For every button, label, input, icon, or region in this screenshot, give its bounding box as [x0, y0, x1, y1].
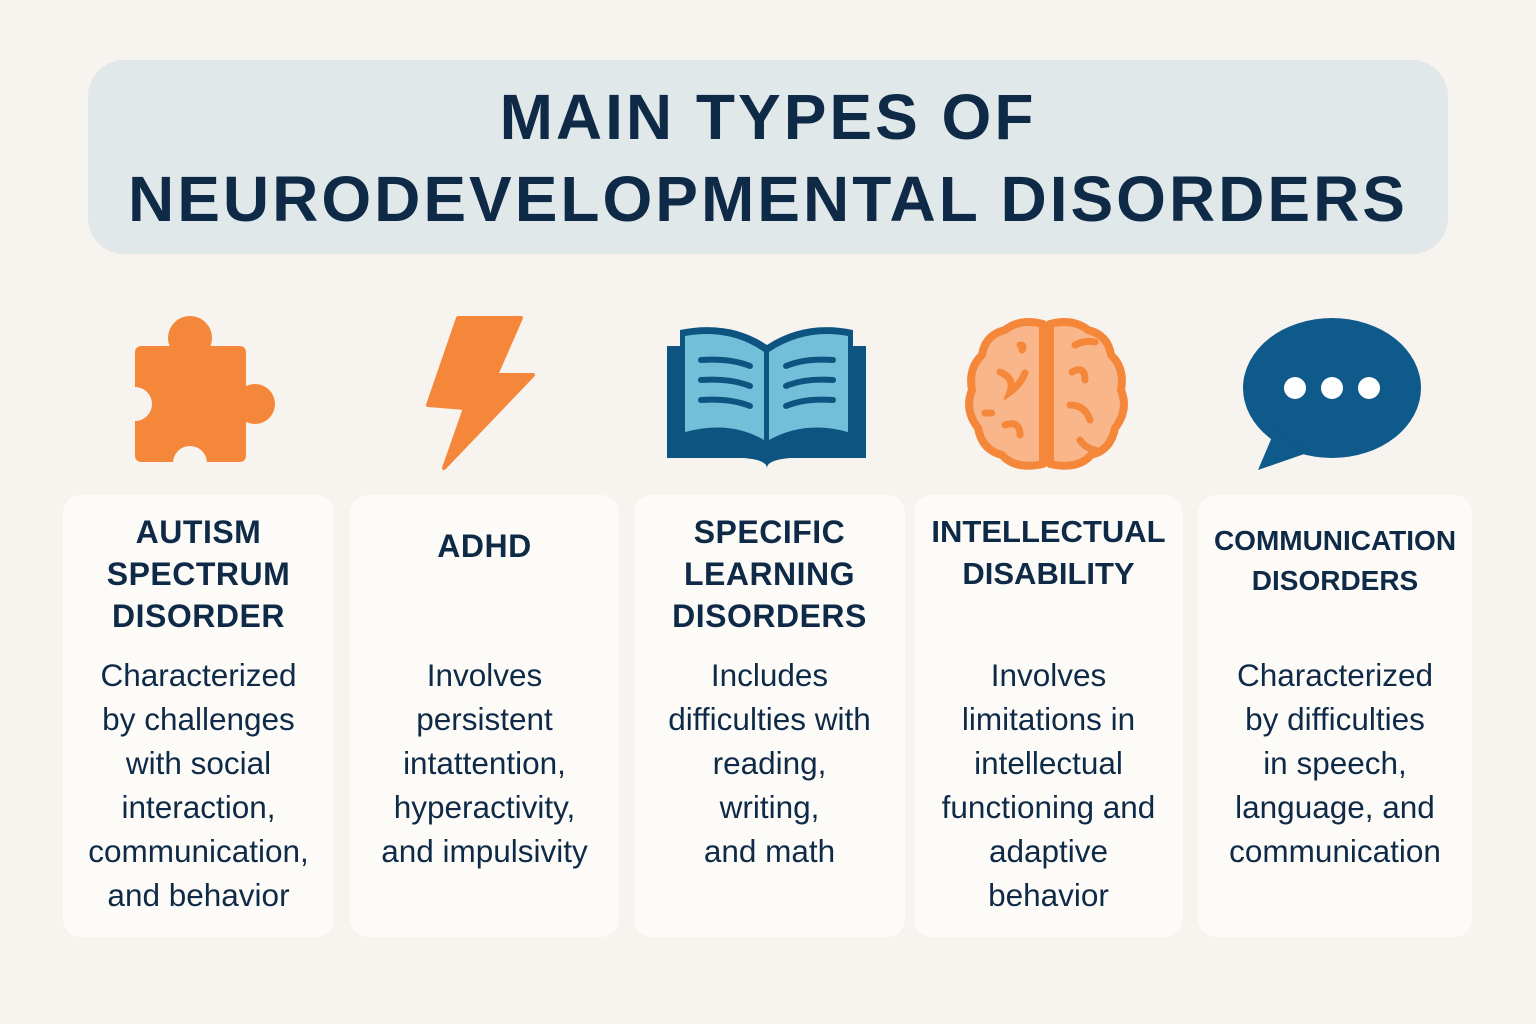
- panel: autism: by challenges: [102, 701, 295, 737]
- panel: adhd: hyperactivity,: [394, 789, 575, 825]
- icon: speech bubble: [1243, 318, 1421, 470]
- panel: learning: reading,: [713, 745, 826, 781]
- panel: adhd: intattention,: [403, 745, 566, 781]
- panel: adhd: persistent: [416, 701, 553, 737]
- panel: autism: Characterized: [100, 657, 297, 693]
- panel: intellectual: DISABILITY: [962, 556, 1135, 591]
- panel: autism: and behavior: [107, 877, 290, 913]
- icon: lightning bolt: [426, 316, 535, 470]
- title: NEURODEVELOPMENTAL DISORDERS: [128, 163, 1408, 235]
- icon: book: [667, 327, 866, 468]
- icon: brain: [965, 318, 1128, 470]
- panel: intellectual: behavior: [988, 877, 1109, 913]
- panel: intellectual: intellectual: [974, 745, 1123, 781]
- panel: communication: by difficulties: [1245, 701, 1425, 737]
- panel: communication: DISORDERS: [1252, 565, 1418, 596]
- panel: adhd: and impulsivity: [381, 833, 588, 869]
- title: MAIN TYPES OF: [500, 81, 1036, 153]
- panel: communication: in speech,: [1263, 745, 1407, 781]
- panel: autism: AUTISM: [136, 514, 261, 550]
- panel: adhd: [350, 495, 619, 937]
- panel: learning: difficulties with: [668, 701, 871, 737]
- panel: autism: DISORDER: [112, 598, 285, 634]
- panel: learning: and math: [704, 833, 835, 869]
- panel: learning: Includes: [711, 657, 828, 693]
- panel: learning: DISORDERS: [672, 598, 867, 634]
- panel: communication: COMMUNICATION: [1214, 525, 1456, 556]
- panel: intellectual: INTELLECTUAL: [931, 514, 1166, 549]
- panel: autism: SPECTRUM: [107, 556, 290, 592]
- panel: learning: LEARNING: [684, 556, 855, 592]
- panel: adhd: ADHD: [437, 528, 532, 564]
- panel: communication: communication: [1229, 833, 1441, 869]
- panel: intellectual: functioning and: [942, 789, 1155, 825]
- panel: learning: SPECIFIC: [694, 514, 845, 550]
- panel: autism: with social: [126, 745, 271, 781]
- panel: intellectual: [914, 495, 1183, 937]
- icon: puzzle: [135, 316, 275, 462]
- panel: communication: Characterized: [1237, 657, 1433, 693]
- panel: learning: writing,: [720, 789, 819, 825]
- panel: adhd: Involves: [427, 657, 542, 693]
- panel: intellectual: limitations in: [962, 701, 1135, 737]
- title: [88, 60, 1448, 254]
- panel: communication: [1198, 495, 1472, 937]
- panel: autism: [63, 495, 334, 937]
- panel: intellectual: adaptive: [989, 833, 1108, 869]
- panel: communication: language, and: [1235, 789, 1435, 825]
- panel: autism: interaction,: [121, 789, 276, 825]
- panel: autism: communication,: [88, 833, 309, 869]
- panel: learning: [634, 495, 905, 937]
- panel: intellectual: Involves: [991, 657, 1106, 693]
